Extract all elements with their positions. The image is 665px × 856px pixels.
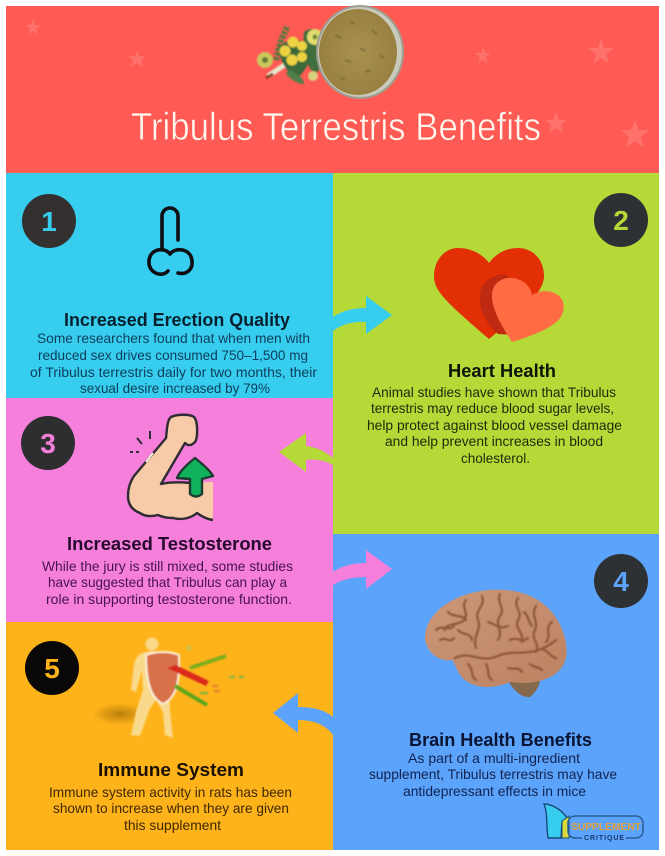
body text: terrestris may reduce blood sugar levels, — [371, 400, 614, 416]
body text: sexual desire increased by 79% — [80, 380, 270, 396]
logo: supplement critique: CRITIQUE — [584, 835, 624, 842]
body text: supplement, Tribulus terrestris may have — [369, 766, 617, 782]
heading: Brain Health Benefits — [409, 730, 592, 750]
number badge 4 — [594, 554, 648, 608]
body text: Animal studies have shown that Tribulus — [372, 384, 616, 400]
body text: and help prevent increases in blood — [385, 433, 603, 449]
logo: supplement critique — [544, 804, 643, 842]
body text: of Tribulus terrestris daily for two months, their — [30, 364, 317, 380]
body text — [30, 330, 317, 396]
number badge 4: 4 — [613, 566, 629, 597]
arrow: panel 3 to 4 — [333, 550, 392, 589]
body text — [42, 558, 293, 607]
number badge 2 — [594, 193, 648, 247]
number badge 5 — [25, 641, 79, 695]
body text: While the jury is still mixed, some studies — [42, 558, 293, 574]
panel: 4 brain health — [333, 534, 659, 850]
logo: supplement critique: SUPPLEMENT — [571, 822, 641, 833]
body text — [369, 750, 617, 799]
body text: antidepressant effects in mice — [403, 783, 586, 799]
number badge 1: 1 — [41, 206, 57, 237]
panel: 1 erection quality — [6, 173, 333, 398]
arrow: panel 4 to 5 — [273, 693, 333, 735]
body text: Immune system activity in rats has been — [49, 784, 292, 800]
number badge 5: 5 — [44, 653, 60, 684]
image: tribulus plant and powder bowl — [257, 5, 404, 99]
icon: hearts — [434, 248, 564, 342]
body text: role in supporting testosterone function. — [46, 591, 292, 607]
body text: cholesterol. — [461, 450, 530, 466]
number badge 2: 2 — [613, 205, 629, 236]
body text: reduced sex drives consumed 750–1,500 mg — [38, 347, 308, 363]
icon: figure with shield — [92, 638, 244, 738]
heading: Heart Health — [448, 361, 556, 381]
body text — [367, 384, 622, 466]
panel: 5 immune system — [6, 622, 333, 850]
number badge 3 — [21, 416, 75, 470]
body text: shown to increase when they are given — [53, 800, 289, 816]
number badge 3: 3 — [40, 428, 56, 459]
heading: Immune System — [98, 760, 244, 780]
panel: 2 heart health — [333, 173, 659, 534]
title: Tribulus Terrestris Benefits — [131, 106, 541, 149]
icon: brain — [425, 590, 567, 697]
number badge 1 — [22, 194, 76, 248]
heading: Increased Erection Quality — [64, 310, 290, 330]
icon: anatomy outline — [149, 208, 192, 274]
arrow: panel 2 to 3 — [279, 433, 333, 472]
decorative stars — [25, 19, 649, 148]
panel: 3 testosterone — [6, 398, 333, 622]
body text: have suggested that Tribulus can play a — [48, 574, 287, 590]
body text: As part of a multi-ingredient — [408, 750, 580, 766]
heading: Increased Testosterone — [67, 534, 272, 554]
body text: this supplement — [124, 817, 221, 833]
body text: Some researchers found that when men with — [37, 330, 310, 346]
icon: flexed arm with up arrow — [128, 415, 213, 520]
body text: help protect against blood vessel damage — [367, 417, 622, 433]
arrow: panel 1 to 2 — [333, 296, 392, 334]
panel: header — [6, 5, 659, 173]
body text — [49, 784, 292, 833]
